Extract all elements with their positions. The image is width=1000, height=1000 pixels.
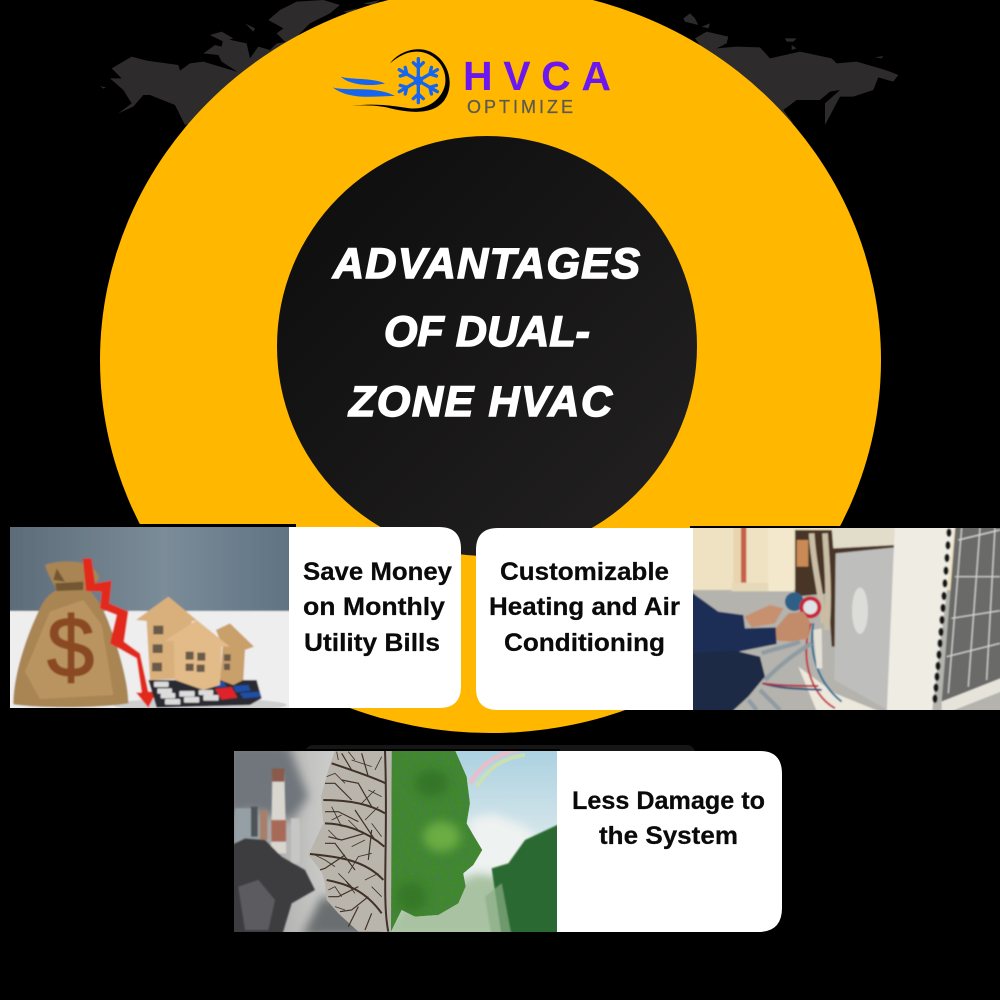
photo: money bag and houses — [7, 523, 293, 712]
panel: save money — [6, 523, 461, 712]
card background — [553, 751, 782, 932]
card text: Save Money — [303, 558, 452, 586]
card text — [303, 558, 452, 657]
logo: HVCA Optimize — [333, 49, 611, 117]
card background — [285, 527, 461, 708]
panel: customizable heating and air conditioning — [476, 523, 1000, 715]
panel: less damage to the system — [228, 745, 782, 938]
logo tagline: OPTIMIZE — [467, 97, 573, 117]
card text: the System — [599, 822, 738, 850]
card text — [572, 787, 765, 850]
card text: Conditioning — [504, 629, 665, 657]
world map background — [100, 0, 898, 150]
card text: Customizable — [500, 558, 669, 586]
title: ZONE HVAC — [347, 378, 613, 426]
yellow circle — [100, 0, 881, 733]
photo: technician checking AC unit — [688, 523, 1000, 715]
photo: money bag and houses: $ — [47, 601, 94, 696]
photo: half-dead half-green tree face — [228, 745, 561, 938]
face: green foliage — [391, 750, 482, 932]
logo wordmark: HVCA — [463, 53, 611, 99]
card text: on Monthly — [303, 593, 445, 621]
dark strip behind third panel — [305, 745, 695, 765]
card text: Utility Bills — [304, 629, 440, 657]
card text: Heating and Air — [489, 593, 680, 621]
icon: snowflake with air swoosh — [333, 49, 450, 112]
title: ADVANTAGES — [332, 240, 640, 288]
title — [332, 240, 640, 426]
title: OF DUAL- — [384, 308, 590, 356]
card text: Less Damage to — [572, 787, 765, 815]
card background — [476, 528, 697, 710]
face: bare branches — [308, 750, 392, 932]
dark title circle — [277, 136, 697, 556]
card text — [489, 558, 680, 657]
